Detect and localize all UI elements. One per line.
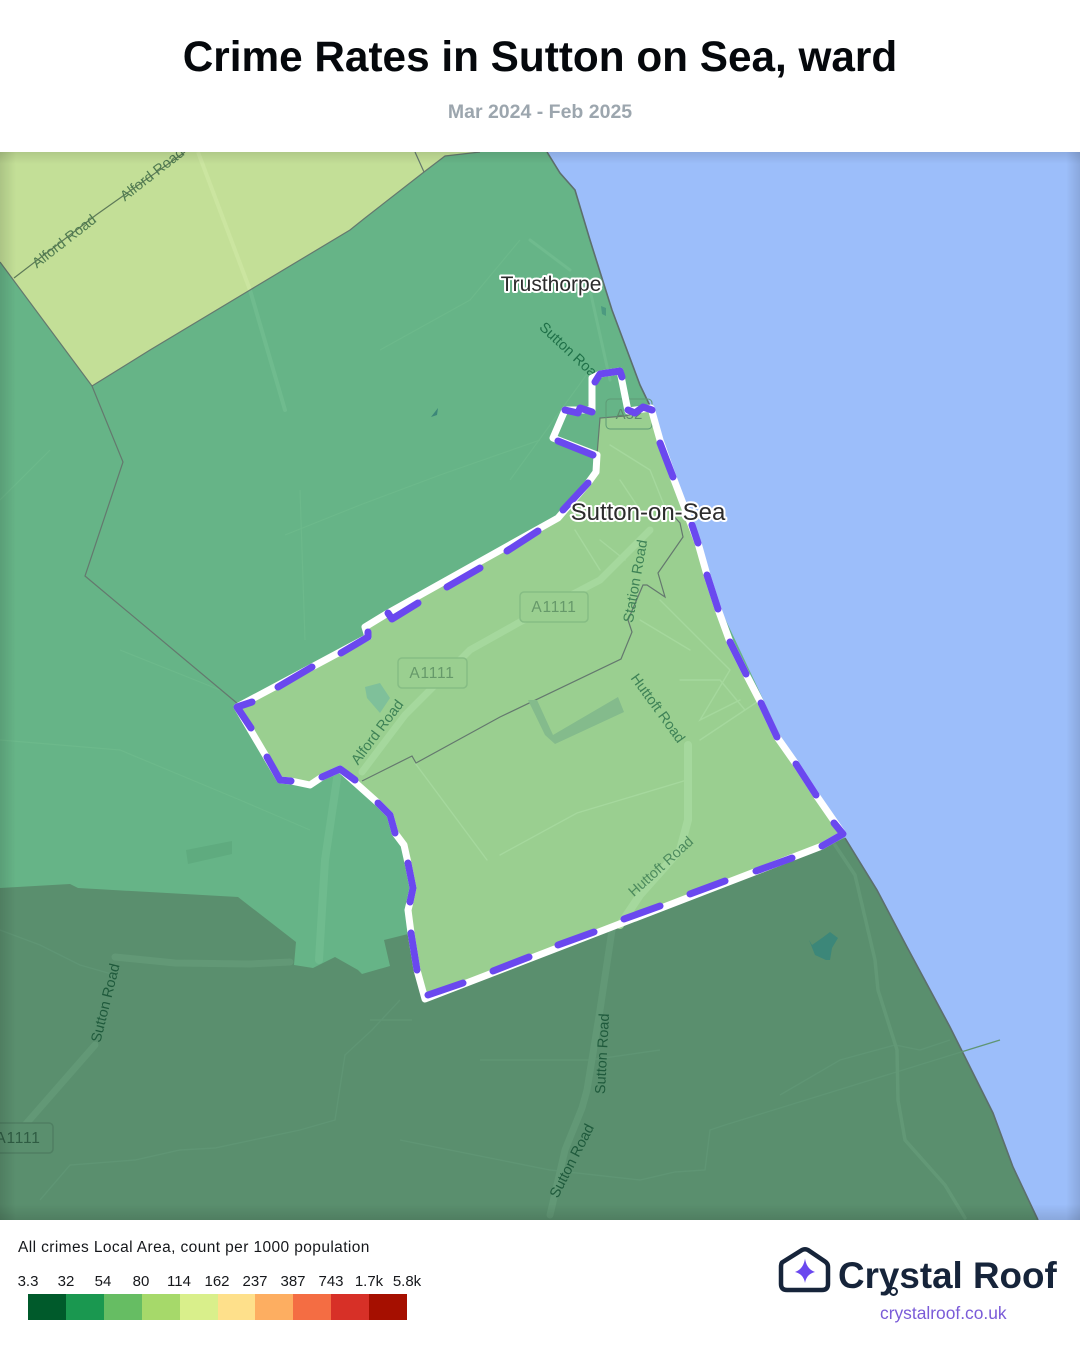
road labels: Sutton Road bbox=[89, 962, 124, 1044]
legend scale labels: 387 bbox=[280, 1273, 306, 1290]
legend scale labels: 114 bbox=[167, 1273, 191, 1290]
coast line bbox=[547, 152, 1038, 1220]
water and park features bbox=[186, 306, 838, 960]
roads in ward bbox=[362, 445, 760, 925]
road labels bbox=[29, 145, 697, 1201]
road labels: Station Road bbox=[621, 539, 651, 624]
road on yellow-green ward bbox=[198, 152, 250, 290]
area: mid-green neighbouring wards bbox=[0, 152, 1038, 1220]
place label: Sutton-on-Sea: Sutton-on-Sea bbox=[571, 499, 726, 526]
faint field lines bbox=[0, 240, 590, 830]
map bbox=[0, 152, 1080, 1220]
legend scale labels: 743 bbox=[318, 1273, 344, 1290]
road shield: A1111 bbox=[398, 658, 467, 688]
road shield: A1111: A1111 bbox=[409, 665, 455, 682]
logo: Crystal Roof bbox=[778, 1247, 1057, 1323]
title: Crime Rates in Sutton on Sea, ward bbox=[183, 33, 897, 80]
place label: Trusthorpe: Trusthorpe bbox=[501, 273, 601, 296]
legend scale labels bbox=[18, 1273, 422, 1290]
road shield: A52 bbox=[606, 399, 652, 429]
legend scale labels: 1.7k bbox=[355, 1273, 383, 1290]
road labels: Sutton Road bbox=[547, 1122, 598, 1201]
website url: crystalroof.co.uk bbox=[880, 1303, 1007, 1323]
legend scale labels: 237 bbox=[242, 1273, 268, 1290]
wordmark y tail dot bbox=[889, 1287, 898, 1296]
road shield: A1111 bbox=[0, 1123, 53, 1153]
legend scale labels: 32 bbox=[58, 1273, 74, 1290]
road shield: A1111: A1111 bbox=[531, 599, 577, 616]
road shield: A52: A52 bbox=[616, 406, 642, 423]
internal ward boundaries bbox=[0, 152, 683, 781]
map edge shading bbox=[0, 152, 1080, 1220]
legend scale labels: 5.8k bbox=[393, 1273, 421, 1290]
road labels: Sutton Road bbox=[593, 1013, 613, 1094]
legend colour bar bbox=[28, 1294, 407, 1320]
roads on dark-green ward bbox=[25, 845, 965, 1218]
area: light-green Sutton on Sea ward bbox=[237, 408, 843, 999]
roads on green wards bbox=[250, 240, 610, 960]
road labels: Alford Road bbox=[348, 697, 407, 768]
area: dark-green ward south bbox=[0, 838, 1038, 1220]
ward boundary: dashed outline bbox=[237, 371, 843, 999]
road labels: Sutton Roa bbox=[536, 319, 600, 381]
legend bbox=[18, 1239, 422, 1320]
subtitle: date range: Mar 2024 - Feb 2025 bbox=[448, 101, 632, 123]
area: yellow-green ward top left bbox=[0, 152, 480, 386]
road labels: Huttoft Road bbox=[627, 671, 688, 746]
legend title: All crimes Local Area, count per 1000 population bbox=[18, 1239, 370, 1256]
icon: house with star bbox=[778, 1247, 830, 1292]
legend scale labels: 54 bbox=[95, 1273, 111, 1290]
road shield: A1111 bbox=[520, 592, 588, 622]
legend scale labels: 3.3 bbox=[18, 1273, 38, 1290]
sea bbox=[0, 152, 1080, 1220]
wordmark: Crystal Roof bbox=[838, 1255, 1057, 1296]
legend scale labels: 162 bbox=[204, 1273, 230, 1290]
legend scale labels: 80 bbox=[133, 1273, 149, 1290]
road labels: Alford Road bbox=[29, 212, 100, 272]
road labels: Huttoft Road bbox=[626, 834, 697, 900]
